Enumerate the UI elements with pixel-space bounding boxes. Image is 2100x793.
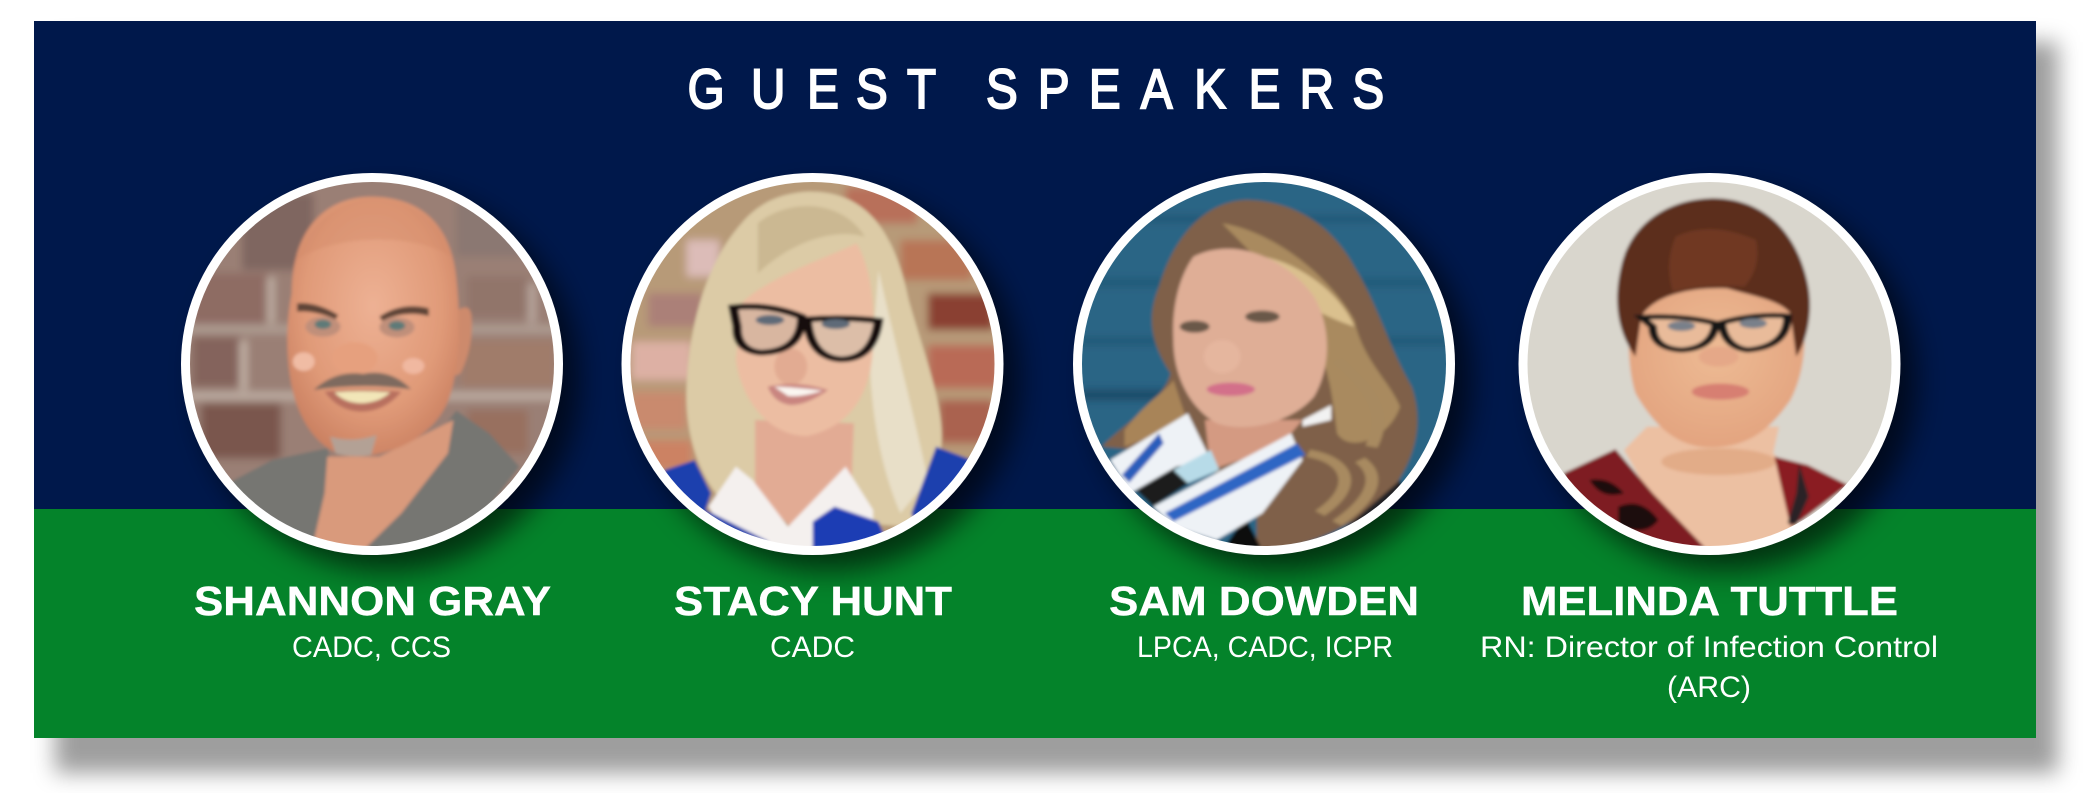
- photo shadow: [638, 189, 1020, 571]
- lips: [1692, 384, 1749, 400]
- shirt: [706, 466, 875, 546]
- glasses: [1641, 317, 1716, 350]
- glasses: [733, 306, 802, 353]
- face: [1629, 273, 1805, 447]
- smile: [325, 389, 401, 412]
- photo frame: [181, 173, 563, 555]
- name: Shannon Gray: SHANNON GRAY: [194, 578, 551, 624]
- highlights and nose: [293, 352, 315, 371]
- name: Melinda Tuttle: MELINDA TUTTLE: [1521, 578, 1898, 624]
- portrait: Melinda Tuttle: [1528, 182, 1892, 546]
- speaker: Melinda Tuttle: [1509, 160, 1922, 571]
- credentials: Sam Dowden: LPCA, CADC, ICPR: [1137, 631, 1393, 664]
- hair: [1617, 198, 1810, 357]
- neck: [315, 420, 453, 553]
- chest and neck: [1624, 425, 1798, 546]
- face: [1173, 249, 1327, 427]
- eyes: [1180, 321, 1210, 333]
- credentials: Melinda Tuttle, line two: (ARC): [1667, 671, 1751, 704]
- stole: [1110, 413, 1211, 493]
- portrait: Stacy Hunt: [630, 182, 994, 546]
- photo frame: [1518, 173, 1900, 555]
- photo shadow: [1089, 189, 1471, 571]
- neck shadow: [1661, 448, 1776, 475]
- robe: [1136, 466, 1189, 508]
- credentials: Shannon Gray: CADC, CCS: [292, 631, 451, 664]
- eyes: [305, 317, 340, 337]
- portrait: Shannon Gray: [190, 182, 554, 546]
- sweater: [231, 411, 519, 560]
- name: Sam Dowden: SAM DOWDEN: [1109, 578, 1419, 624]
- goatee: [330, 435, 377, 456]
- credentials: Stacy Hunt: CADC: [770, 631, 855, 664]
- photo frame: [1073, 173, 1455, 555]
- lips: [1207, 383, 1255, 396]
- eyebrows: [297, 303, 338, 319]
- hair: [1102, 200, 1417, 553]
- eyes: [1668, 321, 1695, 331]
- head: [287, 197, 459, 457]
- speaker: Stacy Hunt: [615, 160, 1020, 571]
- speaker: Sam Dowden: [1050, 160, 1486, 571]
- credentials: Melinda Tuttle, line one: RN: Director of Infection Control: [1480, 631, 1938, 664]
- blouse left: [1563, 448, 1706, 546]
- ear: [454, 306, 474, 376]
- panel: navy upper band: [34, 21, 2036, 509]
- nose: [1699, 347, 1739, 367]
- moustache: [314, 373, 411, 390]
- face: [736, 243, 874, 436]
- eyes: [756, 315, 784, 325]
- lips and smile: [768, 384, 828, 405]
- speaker: Shannon Gray: [160, 160, 599, 571]
- blouse right: [1774, 457, 1848, 527]
- title: GUEST SPEAKERS: [688, 58, 1384, 121]
- photo shadow: [197, 189, 579, 571]
- panel: green lower band: [34, 509, 2036, 738]
- photo shadow: [1534, 189, 1916, 571]
- neck: [755, 420, 854, 527]
- portrait: Sam Dowden: [1082, 182, 1446, 546]
- photo frame: [622, 173, 1004, 555]
- neck: [1205, 420, 1303, 470]
- name: Stacy Hunt: STACY HUNT: [674, 578, 952, 624]
- hair back: [686, 192, 942, 527]
- blazer: [664, 458, 769, 540]
